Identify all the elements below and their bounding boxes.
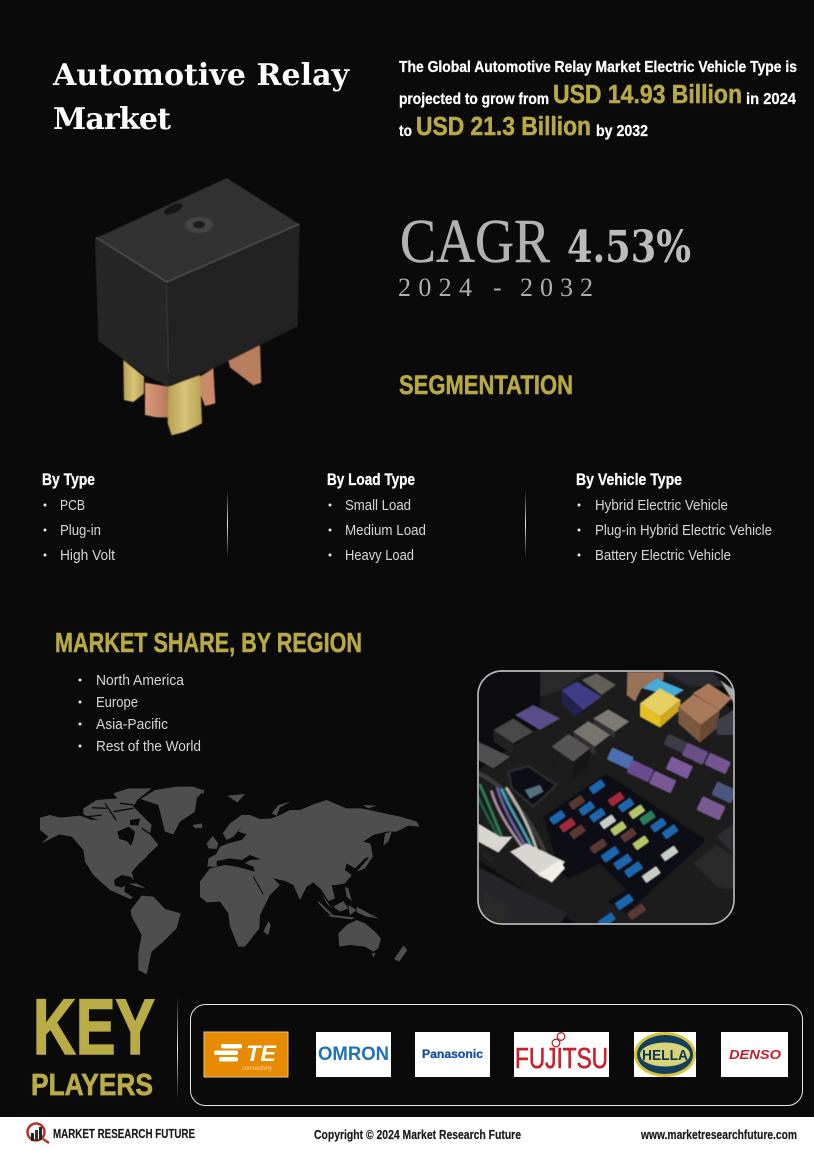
heading: key players — [31, 982, 155, 1102]
relay body — [97, 181, 297, 384]
title: Market — [53, 102, 171, 137]
logo: Panasonic — [415, 1032, 490, 1077]
colored blade fuses — [549, 779, 679, 929]
logo: Omron — [316, 1032, 391, 1077]
segment list: by vehicle type: By Vehicle Type — [576, 471, 682, 489]
heading: key players: PLAYERS — [31, 1067, 153, 1102]
relay pins — [123, 345, 261, 435]
logo: TE Connectivity: TE — [246, 1041, 277, 1066]
heading: market share by region: MARKET SHARE, BY REGION — [55, 627, 362, 658]
market size statement: USD 14.93 Billion — [553, 81, 742, 109]
segment list: by type: Plug-in — [60, 522, 101, 539]
logo: Hella — [634, 1032, 696, 1077]
logo: TE Connectivity: connectivity — [242, 1066, 272, 1072]
footer: MARKET RESEARCH FUTURE — [53, 1126, 195, 1141]
footer: Copyright © 2024 Market Research Future — [314, 1127, 521, 1142]
CAGR figure: CAGR — [400, 208, 551, 276]
segment list: by load type: Medium Load — [345, 522, 426, 539]
region list: Asia-Pacific — [96, 716, 168, 733]
CAGR figure: 2032 — [520, 273, 593, 302]
segment list: by vehicle type — [576, 471, 772, 564]
logo: Fujitsu: FUJITSU — [515, 1043, 608, 1075]
icon: market research future logo — [28, 1124, 49, 1143]
region list — [78, 672, 201, 755]
logo: Hella: HELLA — [642, 1047, 688, 1064]
segment list: by type: High Volt — [60, 547, 116, 564]
segment list: by load type: By Load Type — [327, 471, 415, 489]
market size statement: in 2024 — [746, 91, 796, 108]
market size statement: USD 21.3 Billion — [416, 113, 591, 141]
region list: Rest of the World — [96, 738, 201, 755]
dark chassis — [478, 671, 734, 924]
title: Automotive Relay — [52, 58, 351, 93]
wiring harness — [478, 773, 549, 863]
relays — [493, 718, 533, 743]
market size statement — [399, 59, 797, 141]
segment list: by vehicle type: Hybrid Electric Vehicle — [595, 497, 728, 514]
purple mini fuses — [607, 734, 737, 821]
market size statement: to — [399, 123, 412, 140]
logo: Fujitsu — [514, 1032, 609, 1077]
market size statement: by 2032 — [596, 123, 648, 140]
heading: segmentation: SEGMENTATION — [399, 370, 573, 400]
CAGR figure: 4.53% — [567, 222, 691, 273]
map: eurasia africa oceania — [200, 790, 419, 962]
CAGR figure — [398, 208, 691, 302]
logo: Denso — [721, 1032, 788, 1077]
logo: TE Connectivity — [204, 1032, 288, 1077]
segment list: by vehicle type: Battery Electric Vehicle — [595, 547, 731, 564]
segment list: by vehicle type: Plug-in Hybrid Electric Vehicle — [595, 522, 772, 539]
market size statement: projected to grow from — [399, 91, 549, 108]
segment list: by load type — [327, 471, 426, 564]
segment list: by type: By Type — [42, 471, 95, 489]
CAGR figure: 2024 — [398, 273, 472, 302]
logo: Omron: OMRON — [318, 1044, 389, 1065]
title — [52, 58, 351, 137]
logo: Panasonic: Panasonic — [422, 1047, 483, 1061]
footer — [0, 1117, 814, 1150]
segment list: by type: PCB — [60, 497, 85, 514]
map: americas — [40, 787, 204, 974]
icon: relay photo — [96, 181, 299, 435]
heading: key players: KEY — [33, 982, 155, 1071]
segment list: by load type: Small Load — [345, 497, 411, 514]
region list: Europe — [96, 694, 138, 711]
region list: North America — [96, 672, 185, 689]
panel: key players logos — [190, 1004, 802, 1106]
fuse box photo — [478, 671, 737, 929]
logo: Denso: DENSO — [729, 1047, 781, 1062]
segment list: by type — [42, 471, 116, 564]
CAGR figure: - — [493, 273, 502, 302]
segment list: by load type: Heavy Load — [345, 547, 414, 564]
world map — [40, 787, 419, 974]
